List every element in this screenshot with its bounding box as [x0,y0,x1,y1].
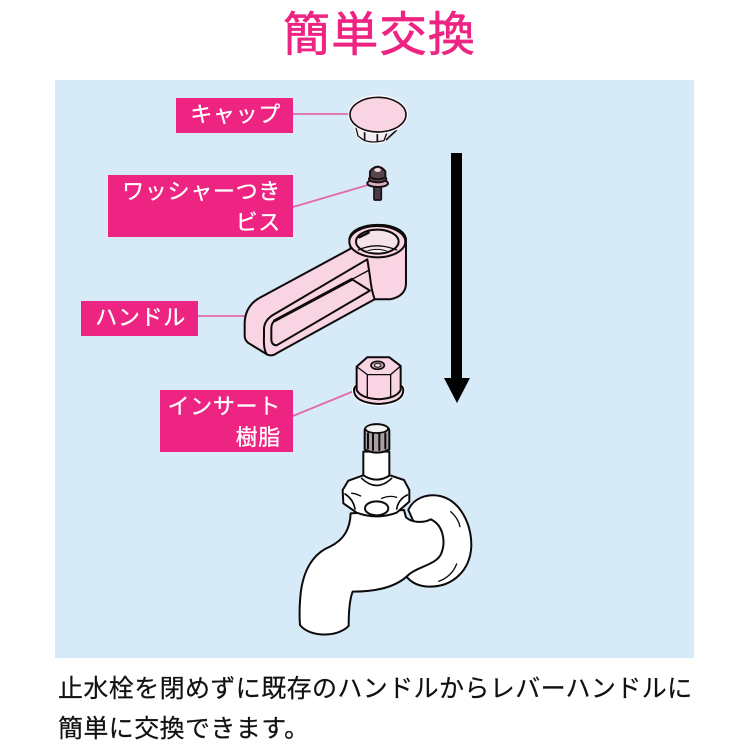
label: washer screw [108,175,293,237]
title: 簡単交換 [283,8,476,61]
description text: 簡単に交換できます。 [58,715,310,743]
description text [58,675,693,743]
label: resin insert [160,390,293,452]
icon: cap [350,97,406,142]
label: resin insert: 樹脂 [236,425,281,450]
label: washer screw: ビス [236,210,281,235]
icon: faucet [300,424,471,635]
label: handle [81,301,198,336]
label: cap [176,98,293,133]
label: cap: キャップ [190,102,281,127]
arrow: downward assembly direction [444,153,470,403]
icon: insert [354,357,403,404]
icon: washer screw [367,167,388,200]
label: resin insert: インサート [167,394,281,419]
label: washer screw: ワッシャーつき [122,179,281,204]
label: handle: ハンドル [95,305,186,330]
icon: lever handle [245,225,406,355]
panel: diagram background [55,80,694,658]
description text: 止水栓を閉めずに既存のハンドルからレバーハンドルに [58,675,693,703]
leader lines [198,114,368,416]
